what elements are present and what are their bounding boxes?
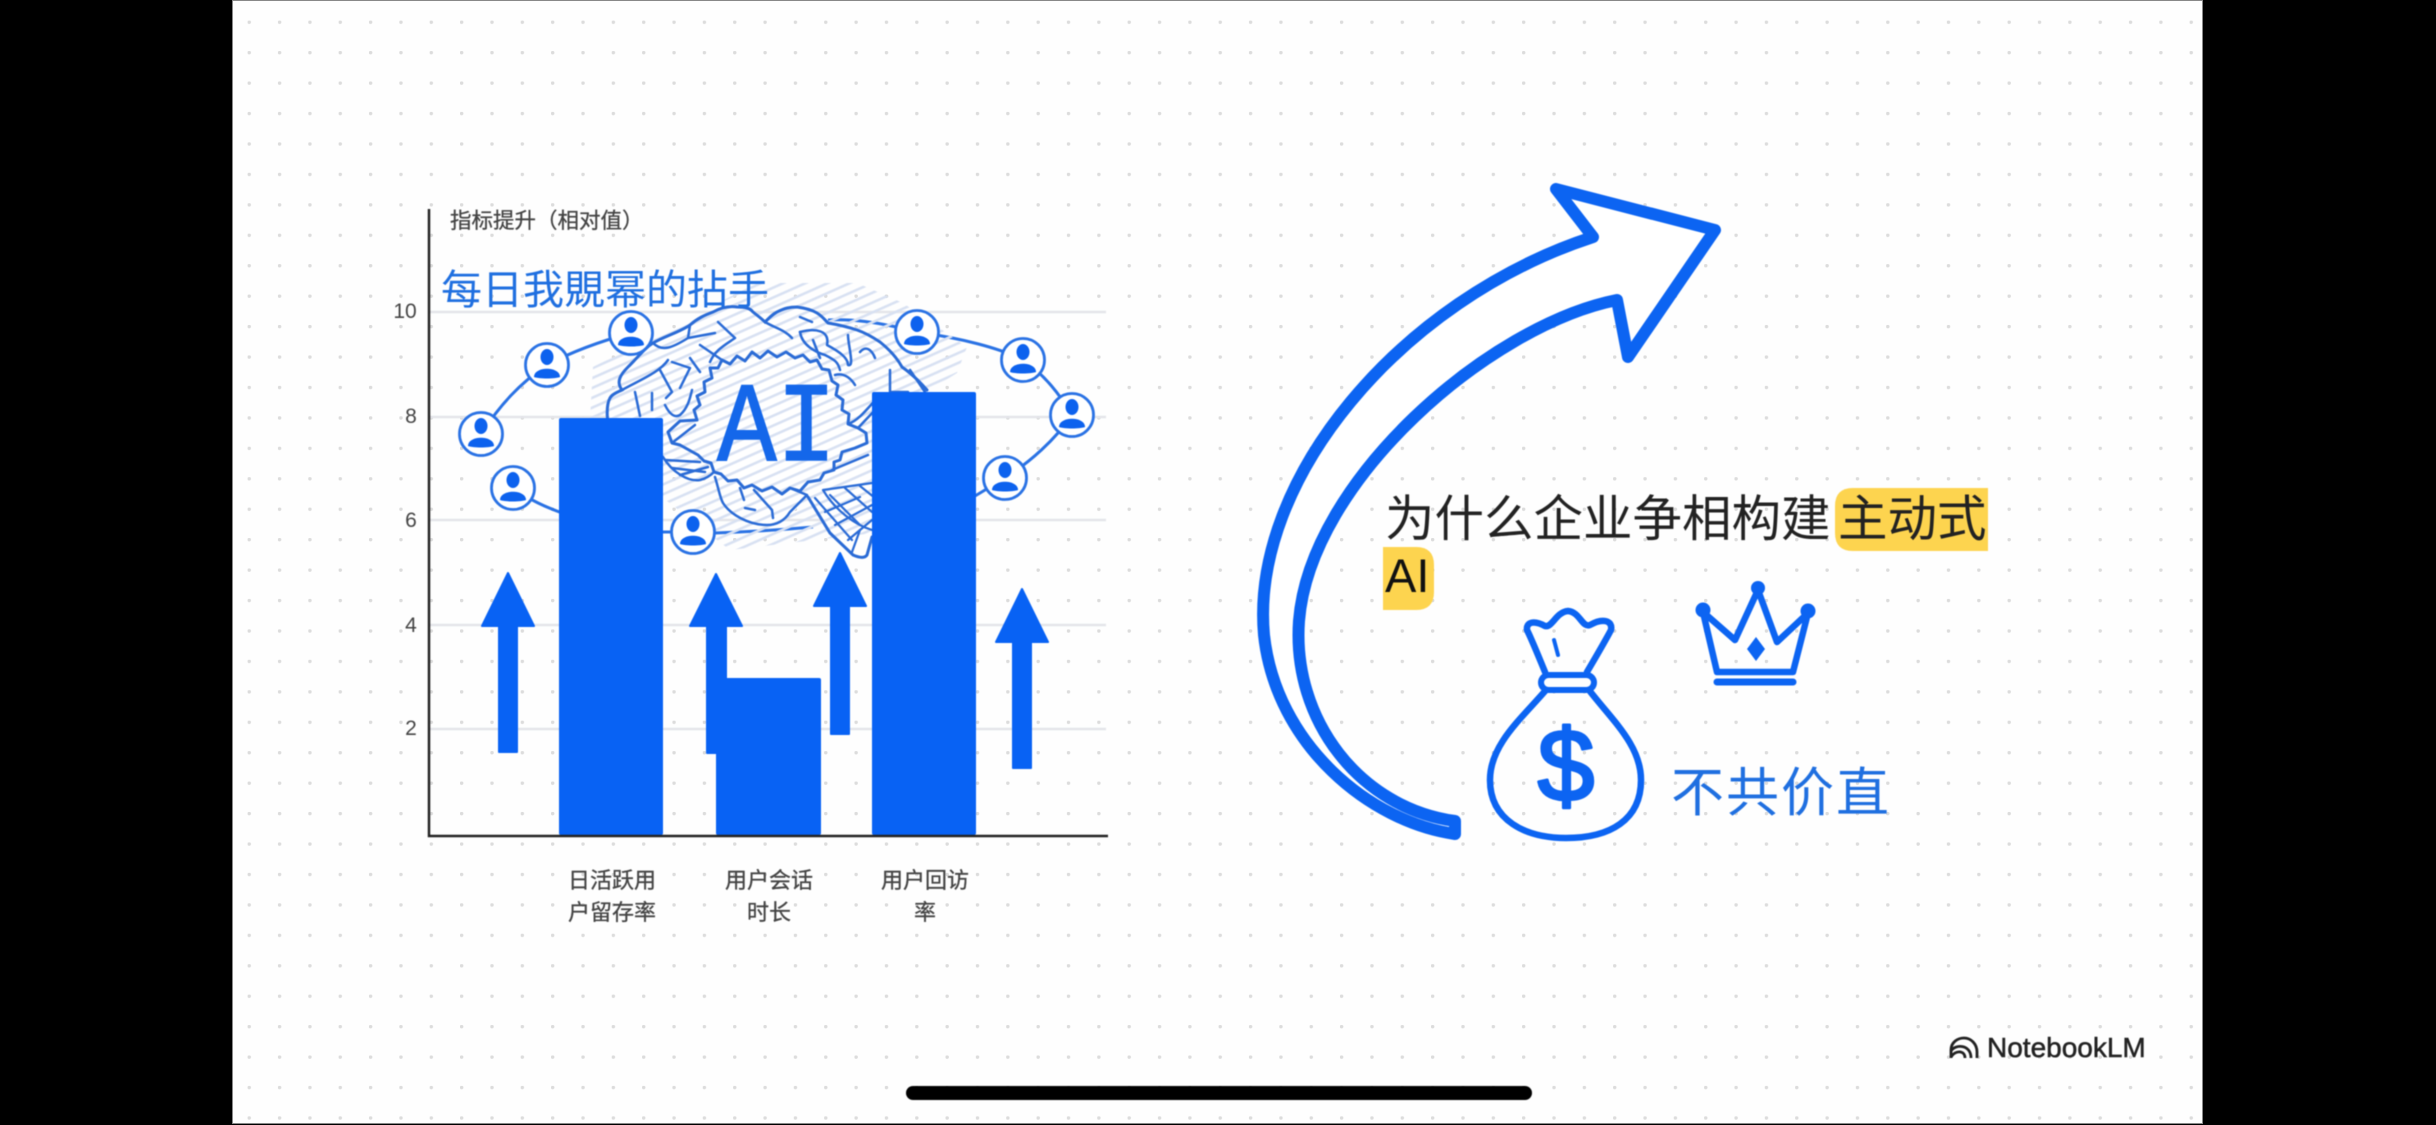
x axis category labels: 日活跃用 [568, 868, 656, 893]
x axis category labels: 用户会话 [725, 868, 813, 893]
icon: crown [1696, 581, 1816, 682]
headline line one: 为什么企业争相构建 [1385, 492, 1830, 547]
x axis category labels: 时长 [747, 900, 791, 925]
brain inner scalloped boundary [668, 351, 867, 494]
y axis tick labels: 6 [405, 509, 417, 532]
x axis category labels [568, 868, 969, 925]
up arrows [482, 553, 1048, 768]
brain pencil hatching [590, 283, 970, 553]
x axis category labels: 户留存率 [568, 900, 656, 925]
blue value caption: 不共价直 [1671, 764, 1891, 823]
y axis title: 指标提升（相对值） [450, 209, 644, 233]
y axis tick labels: 8 [405, 405, 417, 428]
headline line one: 主动式 [1838, 492, 1986, 547]
user network ring [481, 320, 1072, 533]
x axis category labels: 率 [914, 900, 936, 925]
bar chart: metric lift [393, 209, 1108, 925]
logo wordmark: NotebookLM [1987, 1032, 2146, 1063]
brain illustration [590, 283, 970, 557]
y axis tick labels: 10 [393, 300, 417, 323]
brain outline [607, 307, 927, 436]
highlight: AI [1383, 547, 1434, 610]
AI label: AI [717, 366, 836, 494]
phone home indicator [906, 1086, 1532, 1100]
user icons on ring [460, 310, 1094, 554]
axes [429, 209, 1108, 836]
gridlines [430, 312, 1106, 729]
large curved growth arrow [1263, 189, 1715, 834]
lower lobe [715, 477, 807, 525]
y axis tick labels: 2 [405, 717, 417, 740]
y axis tick labels: 4 [405, 614, 417, 637]
NotebookLM logo [1951, 1032, 2146, 1063]
headline line two: AI [1385, 549, 1429, 602]
bars [559, 392, 976, 835]
y axis tick labels [393, 300, 417, 740]
icon: money bag [1490, 611, 1641, 838]
headline [1383, 488, 1988, 610]
highlight: 主动式 [1835, 488, 1988, 551]
x axis category labels: 用户回访 [881, 868, 969, 893]
blue chart caption: 每日我覞幂的拈手 [441, 267, 769, 313]
cerebellum [808, 483, 875, 557]
brain base [607, 307, 935, 557]
logo icon [1951, 1038, 1977, 1058]
brain folds [622, 317, 925, 525]
dollar sign: $ [1538, 709, 1594, 823]
